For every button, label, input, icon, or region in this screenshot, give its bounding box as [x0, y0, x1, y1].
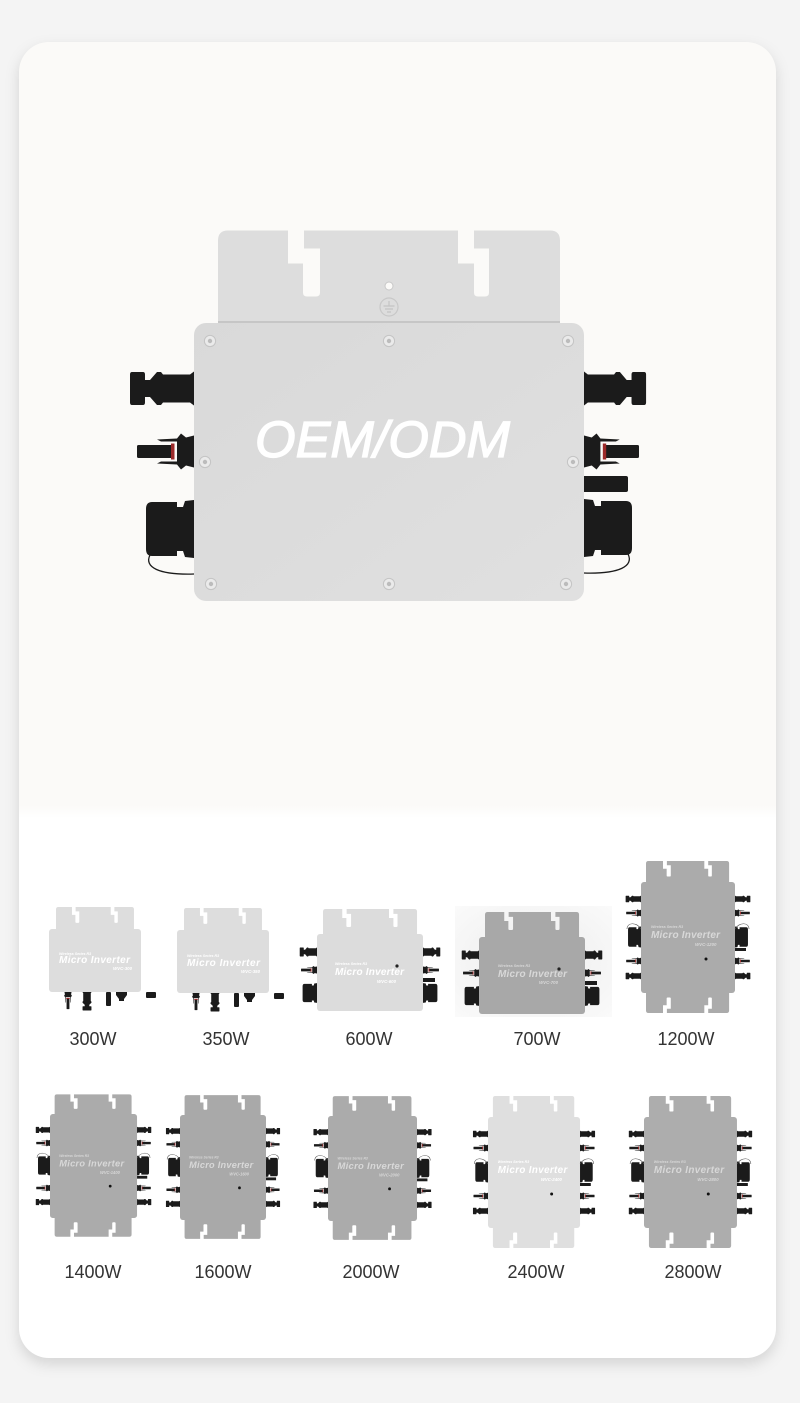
- label 2800W: 2800W: [664, 1262, 722, 1282]
- label 300W: 300W: [69, 1029, 117, 1049]
- product: 700W: [455, 906, 612, 1049]
- inverter 2800W: Wireless Series R3: [654, 1160, 686, 1164]
- inverter 350W: [177, 908, 284, 1012]
- inverter 1200W: Wireless Series R3: [651, 925, 683, 929]
- inverter body: [194, 323, 584, 601]
- inverter 2000W: [313, 1096, 432, 1240]
- inverter 2800W: [629, 1096, 752, 1248]
- inverter 1200W: [626, 861, 750, 1013]
- label 1400W: 1400W: [64, 1262, 122, 1282]
- inverter 700W: Micro Inverter: [498, 969, 568, 980]
- inverter 2400W: [473, 1096, 595, 1248]
- inverter 350W: Micro Inverter: [187, 958, 261, 969]
- top edge highlight: [218, 321, 560, 323]
- inverter 700W: [462, 912, 602, 1014]
- product: 600W: [300, 909, 440, 1049]
- inverter 2800W: Micro Inverter: [654, 1165, 725, 1176]
- product: 1200W: [626, 861, 750, 1049]
- left AC weatherproof cap: [146, 500, 194, 574]
- heading: OEM/ODM: OEM/ODM: [255, 411, 511, 468]
- body screws: [199, 335, 579, 590]
- inverter 600W: [300, 909, 440, 1011]
- inverter 1400W: WVC-1400: [100, 1170, 121, 1175]
- inverter 1600W: WVC-1600: [229, 1171, 250, 1177]
- inverter 300W: WVC-300: [113, 966, 133, 971]
- right short plug: [582, 476, 628, 492]
- inverter 2400W: Wireless Series R3: [498, 1160, 529, 1164]
- inverter 1600W: Micro Inverter: [189, 1160, 255, 1170]
- inverter 300W: [49, 907, 156, 1011]
- inverter 1200W: WVC-1200: [695, 942, 717, 947]
- inverter 2400W: WVC-2400: [541, 1177, 562, 1182]
- inverter 700W: WVC-700: [539, 980, 559, 985]
- right AC weatherproof cap: [584, 499, 632, 573]
- inverter 2800W: WVC-2800: [697, 1177, 719, 1182]
- product: 350W: [177, 908, 284, 1049]
- product: 1400W: [36, 1094, 151, 1282]
- label 700W: 700W: [513, 1029, 561, 1049]
- label 600W: 600W: [345, 1029, 393, 1049]
- product: 2800W: [629, 1096, 752, 1282]
- inverter 600W: Wireless Series R3: [335, 962, 367, 966]
- hero product: micro inverter: [130, 230, 646, 601]
- right male connector: [584, 434, 639, 470]
- left MC4 connector: [130, 372, 194, 406]
- inverter 2000W: Micro Inverter: [337, 1161, 405, 1172]
- inverter 300W: Micro Inverter: [59, 955, 131, 966]
- photo backdrop: [455, 906, 612, 1017]
- product: 2400W: [473, 1096, 595, 1282]
- product: 1600W: [166, 1095, 280, 1282]
- label 2400W: 2400W: [507, 1262, 565, 1282]
- inverter 1400W: Micro Inverter: [59, 1158, 125, 1168]
- left male connector: [137, 434, 194, 470]
- inverter 700W: Wireless Series R3: [498, 964, 530, 968]
- label 350W: 350W: [202, 1029, 250, 1049]
- inverter 2000W: WVC-2000: [379, 1173, 400, 1178]
- product: 300W: [49, 907, 156, 1049]
- inverter 1600W: [166, 1095, 280, 1239]
- product: 2000W: [313, 1096, 432, 1282]
- label 2000W: 2000W: [342, 1262, 400, 1282]
- inverter 2000W: Wireless Series R3: [337, 1157, 368, 1161]
- label 1600W: 1600W: [194, 1262, 252, 1282]
- inverter 1400W: Wireless Series R3: [59, 1154, 89, 1158]
- inverter 1400W: [36, 1094, 151, 1237]
- label 1200W: 1200W: [657, 1029, 715, 1049]
- right MC4 connector: [584, 372, 646, 406]
- inverter 600W: WVC-600: [377, 979, 397, 984]
- inverter 1600W: Wireless Series R3: [189, 1155, 219, 1160]
- inverter 350W: WVC-350: [241, 969, 261, 974]
- inverter 2400W: Micro Inverter: [498, 1165, 568, 1176]
- inverter 600W: Micro Inverter: [335, 967, 405, 978]
- inverter 300W: Wireless Series R3: [59, 952, 91, 956]
- inverter 350W: Wireless Series R3: [187, 954, 219, 958]
- inverter 1200W: Micro Inverter: [651, 930, 721, 941]
- mounting plate: [218, 230, 560, 322]
